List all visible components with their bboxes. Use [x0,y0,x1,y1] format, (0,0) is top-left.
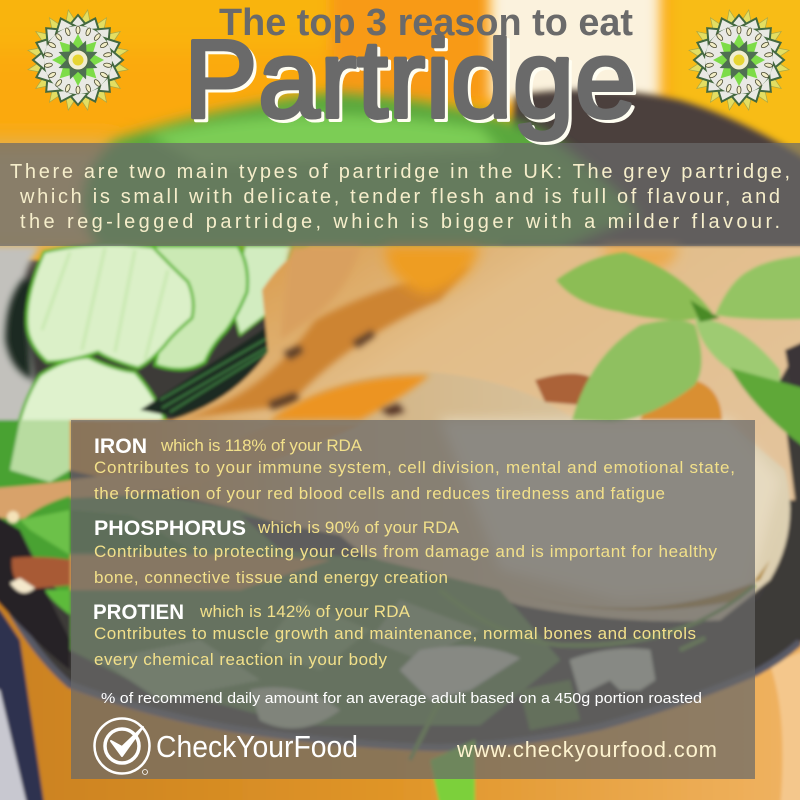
plate light edge left [0,246,40,470]
website: www.checkyourfood.com [456,737,717,762]
intro text [10,161,790,233]
upper partridge body [172,246,800,500]
title: Partridge [187,21,639,144]
nutrient: phosphorus [94,517,718,587]
logo: CheckYourFood [94,718,358,774]
bright parsley on the left [0,420,110,670]
nutrient: iron: IRON [94,435,147,458]
nutrient: protein [93,601,696,669]
lower partridge body [70,372,790,621]
intro text: which is small with delicate, tender flesh and is full of flavour, and [19,186,780,208]
icon: right mandala [688,9,790,111]
nutrient: phosphorus: PHOSPHORUS [94,517,246,540]
footnote: % of recommend daily amount for an average adult based on a 450g portion roasted [101,690,702,707]
panel: intro band [0,143,800,246]
basil leaves [556,252,800,465]
icon: check mark badge [94,718,150,774]
parsley and legs inside the panel [70,425,755,800]
nutrient: phosphorus: Contributes to protecting your cells from damage and is important for healthy [94,542,718,561]
panel: nutrients [71,420,755,779]
nutrient: phosphorus: which is 90% of your RDA [257,518,460,537]
plate rim highlight [0,590,800,748]
cucumber slices [14,244,292,445]
dark plate rim at the top [500,90,800,260]
green dill herb [83,92,640,250]
nutrient: protein: Contributes to muscle growth and maintenance, normal bones and controls [94,624,696,643]
intro text: There are two main types of partridge in the UK: The grey partridge, [10,161,790,183]
nutrient: protein: PROTIEN [93,601,184,624]
blurred orange backdrop with glass [0,0,800,260]
wooden table [0,560,800,800]
nutrient: iron: which is 118% of your RDA [160,436,363,455]
intro text: the reg-legged partridge, which is bigger with a milder flavour. [20,211,780,233]
logo wordmark: CheckYourFood [156,729,358,764]
title: Partridge [184,18,636,141]
dill sprigs by the leg [140,325,295,420]
icon: left mandala [27,9,129,111]
nutrient: protein: which is 142% of your RDA [199,602,411,621]
nutrient: phosphorus: bone, connective tissue and energy creation [94,568,448,587]
leg bone tips [0,480,72,593]
nutrient: iron [94,435,735,503]
dark plate on the right of the bird [785,330,800,420]
subtitle: The top 3 reason to eat [219,2,633,44]
nutrient: protein: every chemical reaction in your body [94,650,388,669]
nutrient: iron: Contributes to your immune system, cell division, mental and emotional state, [94,458,735,477]
nutrient: iron: the formation of your red blood cells and reduces tiredness and fatigue [94,484,665,503]
